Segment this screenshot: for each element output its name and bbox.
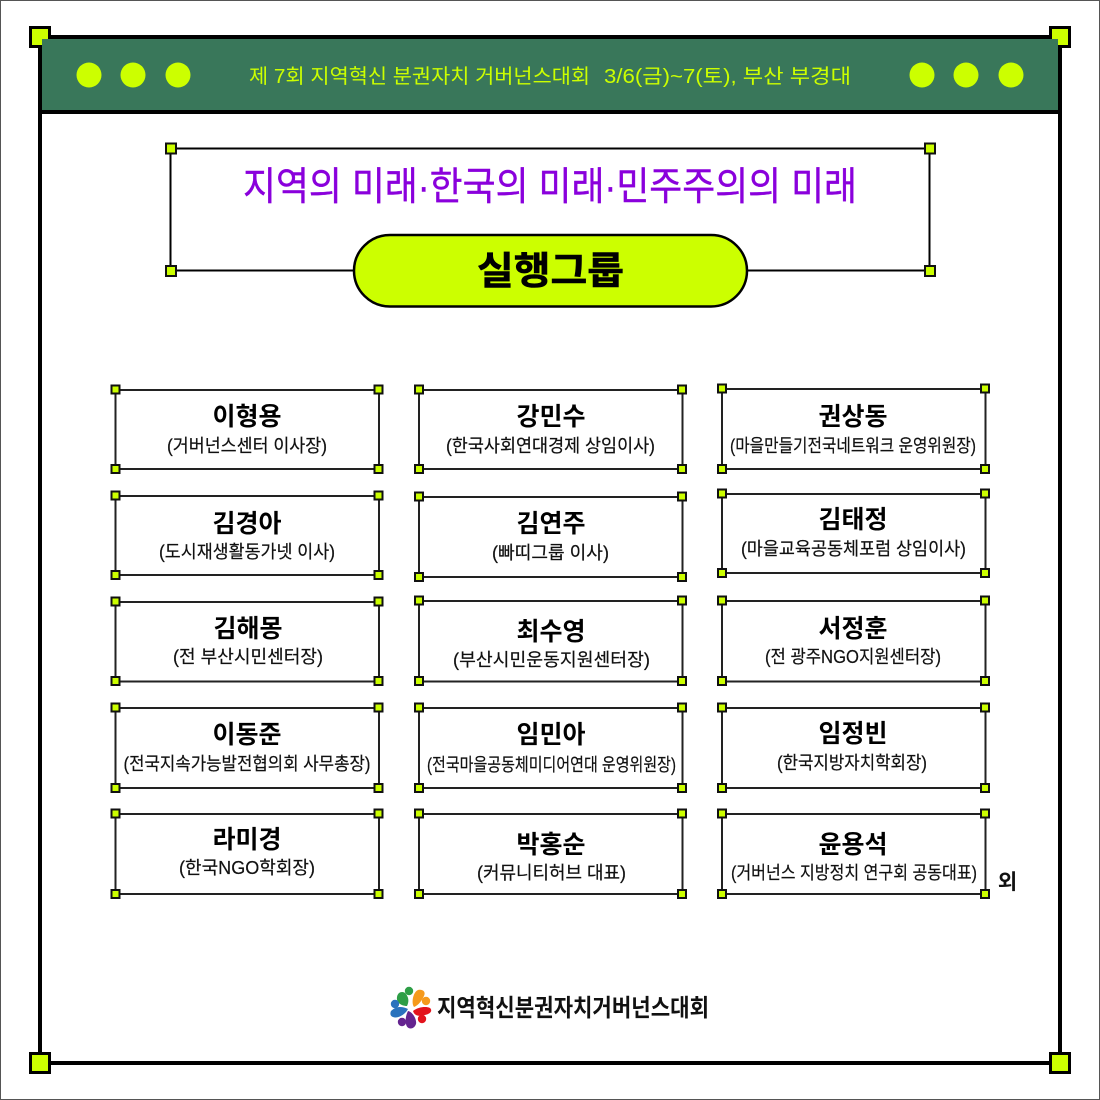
card: 김경아: (도시재생활동가넷 이사): [159, 542, 335, 562]
card: 라미경: [112, 810, 382, 898]
logo wordmark: 지역혁신분권자치거버넌스대회: [437, 995, 709, 1022]
card: 김경아: [112, 492, 382, 579]
card: 임정빈: 임정빈: [818, 720, 888, 748]
card: 최수영: 최수영: [516, 618, 586, 646]
card: 라미경: 라미경: [212, 826, 282, 854]
logo: [390, 987, 709, 1028]
card: 임민아: 임민아: [516, 721, 586, 749]
card: 이동준: 이동준: [212, 721, 282, 749]
card: 권상동: [718, 384, 989, 473]
header text: 제 7회 지역혁신 분권자치 거버넌스대회: [249, 65, 590, 88]
card: 김연주: [415, 492, 686, 581]
card: 강민수: [415, 386, 686, 473]
card: 박홍순: 박홍순: [516, 831, 586, 859]
card: 김해몽: [112, 598, 382, 685]
title panel: [166, 144, 935, 306]
card: 이동준: (전국지속가능발전협의회 사무총장): [124, 754, 370, 774]
card: 권상동: (마을만들기전국네트워크 운영위원장): [730, 436, 976, 456]
card: 임정빈: [718, 704, 989, 792]
others note: 외: [998, 871, 1017, 894]
card: 임정빈: (한국지방자치학회장): [777, 753, 927, 773]
card: 김태정: [718, 490, 989, 577]
header text: [249, 65, 851, 88]
title text: 지역의 미래·한국의 미래·민주주의의 미래: [243, 166, 857, 209]
card: 서정훈: (전 광주NGO지원센터장): [765, 647, 941, 667]
card: 김연주: 김연주: [516, 510, 586, 538]
card: 이형용: 이형용: [212, 403, 282, 431]
card: 박홍순: (커뮤니티허브 대표): [477, 863, 626, 883]
card: 이형용: [112, 386, 382, 473]
card: 라미경: (한국NGO학회장): [179, 858, 315, 878]
card: 김해몽: 김해몽: [213, 615, 283, 643]
card: 김연주: (빠띠그룹 이사): [492, 543, 609, 563]
card: 최수영: (부산시민운동지원센터장): [453, 650, 650, 670]
header text: 3/6(금)~7(토), 부산 부경대: [604, 65, 851, 88]
card: 윤용석: (거버넌스 지방정치 연구회 공동대표): [731, 863, 977, 883]
card: 박홍순: [415, 810, 686, 898]
card: 김해몽: (전 부산시민센터장): [173, 647, 323, 667]
header bar: [40, 39, 1060, 112]
card: 김태정: 김태정: [818, 506, 888, 534]
group pill: [354, 235, 747, 306]
card: 이형용: (거버넌스센터 이사장): [167, 436, 327, 456]
card: 최수영: [415, 596, 686, 685]
card: 서정훈: 서정훈: [818, 615, 888, 643]
card: 이동준: [112, 704, 382, 792]
card: 강민수: (한국사회연대경제 상임이사): [446, 436, 655, 456]
card: 김태정: (마을교육공동체포럼 상임이사): [741, 539, 966, 559]
group heading: 실행그룹: [477, 251, 624, 293]
card: 임민아: [415, 704, 686, 792]
card: 강민수: 강민수: [516, 403, 586, 431]
card: 김경아: 김경아: [212, 510, 282, 538]
card: 윤용석: 윤용석: [818, 831, 888, 859]
card: 윤용석: [718, 810, 989, 898]
card: 권상동: 권상동: [818, 403, 888, 431]
icon: colorful people emblem: [390, 987, 431, 1028]
card: 임민아: (전국마을공동체미디어연대 운영위원장): [427, 755, 676, 775]
card: 서정훈: [718, 596, 989, 685]
